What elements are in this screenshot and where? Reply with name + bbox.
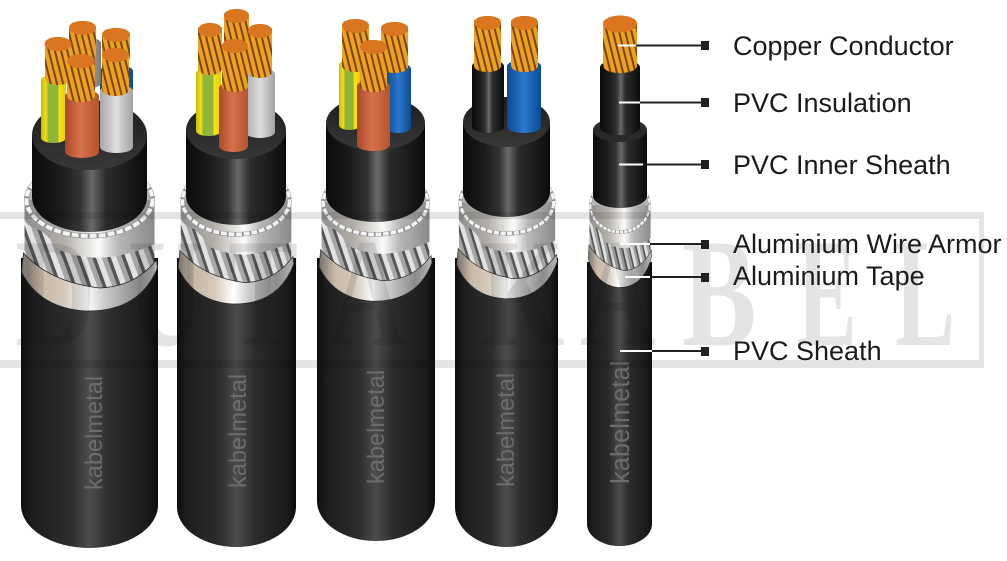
- cable 3: three core: [317, 19, 435, 541]
- print: kabelmetal: kabelmetal: [607, 361, 635, 484]
- print: kabelmetal: kabelmetal: [82, 376, 108, 490]
- watermark: DUTA KABEL frame and letters: [0, 207, 984, 379]
- label: PVC sheath: PVC Sheath: [733, 336, 882, 366]
- leader: aluminium tape: [625, 273, 709, 282]
- yellow-green core: [339, 19, 369, 130]
- outer sheath: [177, 258, 296, 547]
- armour and tape: [457, 171, 557, 299]
- yellow-green core: [196, 23, 222, 136]
- leader: PVC inner sheath: [619, 160, 709, 169]
- outer sheath: [317, 258, 435, 541]
- cable 5: single core: [587, 16, 652, 546]
- watermark: DUTA KABEL frame and letters: E: [797, 208, 857, 379]
- inner sheath: [186, 130, 286, 225]
- armour and tape: [319, 170, 432, 301]
- inner sheath: [463, 122, 550, 217]
- watermark: DUTA KABEL frame and letters: D: [15, 208, 96, 379]
- outer sheath: [455, 258, 558, 547]
- print: kabelmetal: kabelmetal: [226, 374, 252, 488]
- print: kabelmetal: kabelmetal: [364, 370, 390, 484]
- back conductors: [69, 21, 130, 64]
- back conductor: [224, 9, 249, 53]
- label: aluminium tape: Aluminium Tape: [733, 261, 925, 291]
- yellow-green core: [41, 37, 72, 143]
- grey-white core: [100, 48, 133, 153]
- leader: PVC insulation: [619, 98, 709, 107]
- outer sheath: [587, 262, 652, 546]
- watermark: DUTA KABEL frame and letters: A: [580, 207, 656, 379]
- inner sheath: [326, 123, 425, 222]
- watermark: DUTA KABEL frame and letters: L: [895, 208, 955, 379]
- leader: PVC sheath: [620, 347, 709, 356]
- outer sheath: [21, 258, 158, 548]
- orange core: [357, 40, 390, 151]
- armour and tape: [22, 164, 158, 311]
- blue core: [507, 16, 541, 133]
- leader: copper conductor: [618, 41, 709, 50]
- watermark: DUTA KABEL frame and letters: U: [128, 207, 204, 379]
- leader: aluminium wire armor: [620, 240, 709, 249]
- label: copper conductor: Copper Conductor: [733, 31, 954, 61]
- watermark: DUTA KABEL frame and letters: B: [682, 208, 756, 379]
- cable 1: five core: [21, 21, 158, 548]
- core: grey and blue back cores: [79, 38, 133, 95]
- cable 2: four core: [177, 9, 296, 547]
- grey-white core: [245, 24, 275, 138]
- label: PVC insulation: PVC Insulation: [733, 88, 912, 118]
- blue core: [381, 22, 411, 133]
- watermark: DUTA KABEL frame and letters: K: [480, 207, 564, 379]
- armour and tape: [178, 167, 294, 304]
- conductor: [603, 16, 637, 73]
- inner sheath: [593, 130, 647, 208]
- orange core: [219, 39, 248, 152]
- armour and tape: [588, 179, 652, 288]
- label: aluminium wire armor: Aluminium Wire Armor: [733, 229, 1002, 259]
- cable 4: two core: [455, 16, 558, 547]
- watermark: DUTA KABEL frame and letters: A: [328, 207, 406, 379]
- label: PVC inner sheath: PVC Inner Sheath: [733, 150, 951, 180]
- insulation: [600, 60, 640, 135]
- watermark: DUTA KABEL frame and letters: T: [228, 207, 298, 379]
- print: kabelmetal: kabelmetal: [494, 373, 520, 487]
- red core: [65, 54, 99, 158]
- black core: [472, 16, 504, 133]
- inner sheath: [32, 135, 147, 232]
